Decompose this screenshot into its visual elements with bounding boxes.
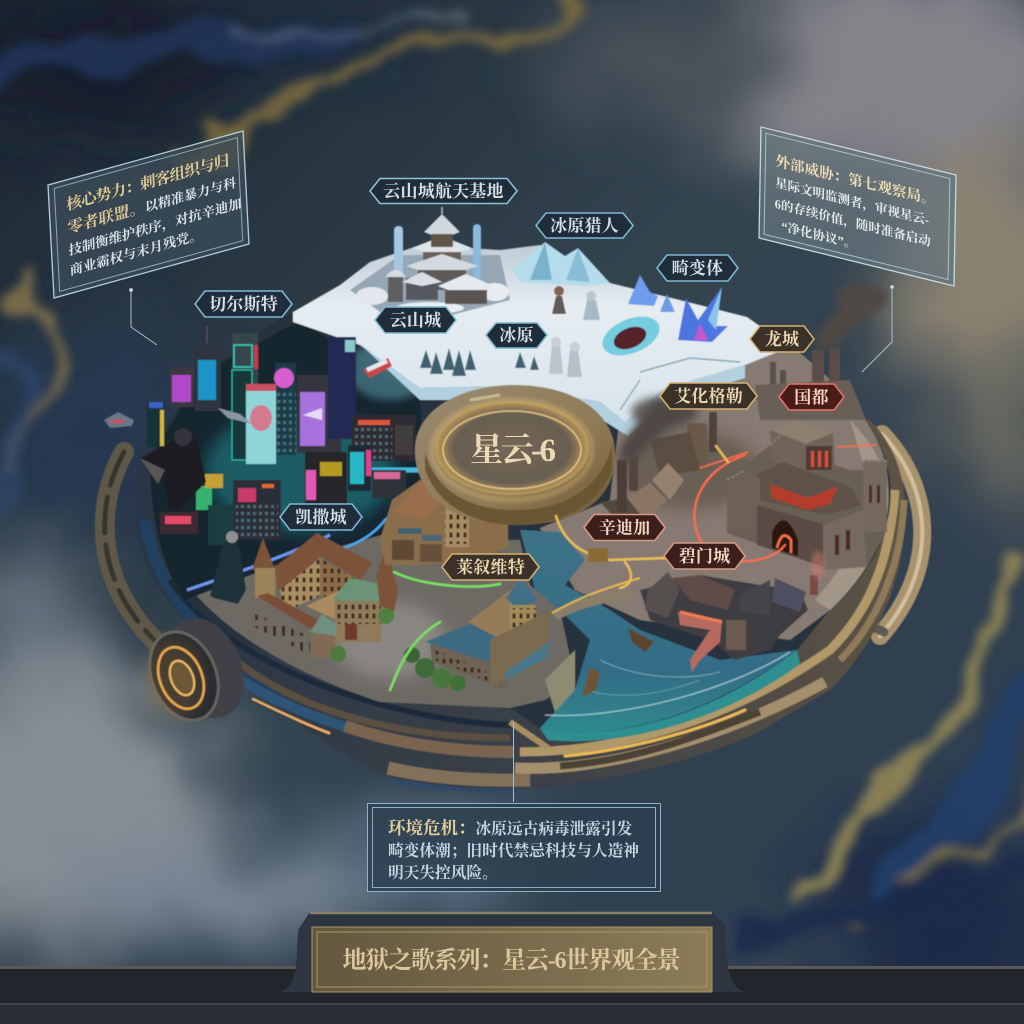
- region: neon city ground: [150, 320, 432, 600]
- green road: [390, 572, 500, 690]
- energy conduit: gold: [556, 446, 728, 588]
- label: Syndicate: 辛迪加: [599, 518, 650, 538]
- icon: river boat: [582, 668, 600, 697]
- label: Mutants: [657, 255, 738, 281]
- energy conduit: red: [694, 445, 875, 561]
- label: Dragon City: [750, 326, 814, 352]
- label: Capital: 国都: [794, 388, 829, 407]
- icon: ice hunters: [549, 286, 600, 377]
- label: Yunshan City: 云山城: [390, 311, 441, 330]
- region: blue-roof hall: [404, 582, 575, 712]
- smoke: [620, 284, 888, 462]
- label: Caesar City: [280, 504, 362, 530]
- label: Ailun Gele: [660, 383, 757, 409]
- icon: neon skyscrapers: [147, 326, 416, 545]
- panel: core powers: [48, 131, 249, 298]
- icon: Yunshan spaceport pagoda: [385, 207, 494, 304]
- label: Capital: [779, 384, 844, 410]
- footer base bar: [0, 966, 1024, 1024]
- region: harbor: [628, 551, 825, 672]
- platform hull: [135, 340, 905, 791]
- region: snowfield: [293, 245, 790, 436]
- label: Laixuweite: 莱叙维特: [456, 557, 525, 577]
- chimneys: Dragon City: [755, 348, 866, 420]
- region: stone town ground: [170, 520, 575, 708]
- panel: core powers: 核心势力：刺客组织与归: [66, 150, 230, 214]
- icon: glowing hub engine: [137, 606, 258, 731]
- label: Ice plain: [486, 323, 547, 348]
- panel: core powers: 技制衡维护秩序，对抗辛迪加: [68, 195, 242, 259]
- label: Nebula-6: 星云-6: [470, 432, 556, 469]
- region: courtyard manor: [240, 533, 398, 663]
- fortress: capital: [727, 420, 887, 570]
- panel: external threat: 6的存续价值，随时准备启动: [775, 196, 931, 250]
- panel: external threat: 星际文明监测者，审视星云-: [775, 175, 929, 229]
- map: floating platform scene: [104, 207, 922, 791]
- label: Yunshan spaceport: 云山城航天基地: [383, 182, 504, 201]
- label: Bimen City: [664, 543, 745, 569]
- label: Ice plain: 冰原: [499, 326, 534, 345]
- label: Bimen City: 碧门城: [679, 547, 730, 566]
- label: Yunshan City: [375, 307, 456, 333]
- label: Yunshan spaceport: [370, 178, 517, 204]
- panel: external threat: [759, 127, 956, 286]
- icon: ice peaks: [512, 242, 610, 286]
- connector lines: [130, 286, 894, 802]
- panel: environmental crisis: 环境危机：冰原远古病毒泄露引发: [388, 818, 633, 838]
- icon: cloaked figure on street: [210, 531, 246, 604]
- platform: outer rim arcs: [105, 434, 922, 650]
- region: industrial ground: [540, 345, 888, 640]
- label: Ice hunters: 冰原猎人: [550, 216, 619, 236]
- region: river and bay: [520, 530, 800, 741]
- panel: core powers: 零者联盟。以精准暴力与科: [67, 172, 237, 237]
- label: Chelsite: 切尔斯特: [209, 294, 278, 314]
- central ring: Nebula-6: [415, 385, 615, 525]
- region: Laixuweite townhouses: [380, 480, 508, 565]
- icon: crater: [597, 309, 665, 363]
- label: Ice hunters: [536, 213, 633, 238]
- title plaque: 地狱之歌系列：星云-6世界观全景: [342, 947, 682, 974]
- icon: flying vehicle: [104, 412, 134, 428]
- label: Chelsite: [195, 291, 292, 317]
- icon: mutant crystals: [628, 275, 728, 342]
- panel: environmental crisis: 畸变体潮；旧时代禁忌科技与人造神: [388, 841, 639, 860]
- icon: pine trees: [420, 348, 539, 376]
- label: Laixuweite: [442, 554, 539, 580]
- panel: external threat: 外部威胁：第七观察局。: [775, 152, 936, 209]
- land base: [150, 312, 891, 732]
- label: Mutants: 畸变体: [672, 258, 723, 278]
- glow strips on rim: [253, 699, 745, 756]
- label: Ailun Gele: 艾化格勒: [674, 386, 743, 406]
- label: Dragon City: 龙城: [765, 330, 799, 349]
- panel: core powers: 商业霸权与末月残党。: [69, 226, 203, 278]
- title plaque: [280, 912, 745, 992]
- icon: cloaked assassin on rooftop: [140, 426, 206, 510]
- label: Caesar City: 凯撒城: [295, 507, 347, 527]
- panel: environmental crisis: 明天失控风险。: [388, 863, 498, 882]
- factories: [600, 412, 717, 524]
- label: Syndicate: [584, 514, 665, 540]
- icon: arched stone bridge: [552, 578, 640, 620]
- panel: external threat: “净化协议”。: [781, 219, 856, 252]
- panel: environmental crisis: [368, 804, 660, 892]
